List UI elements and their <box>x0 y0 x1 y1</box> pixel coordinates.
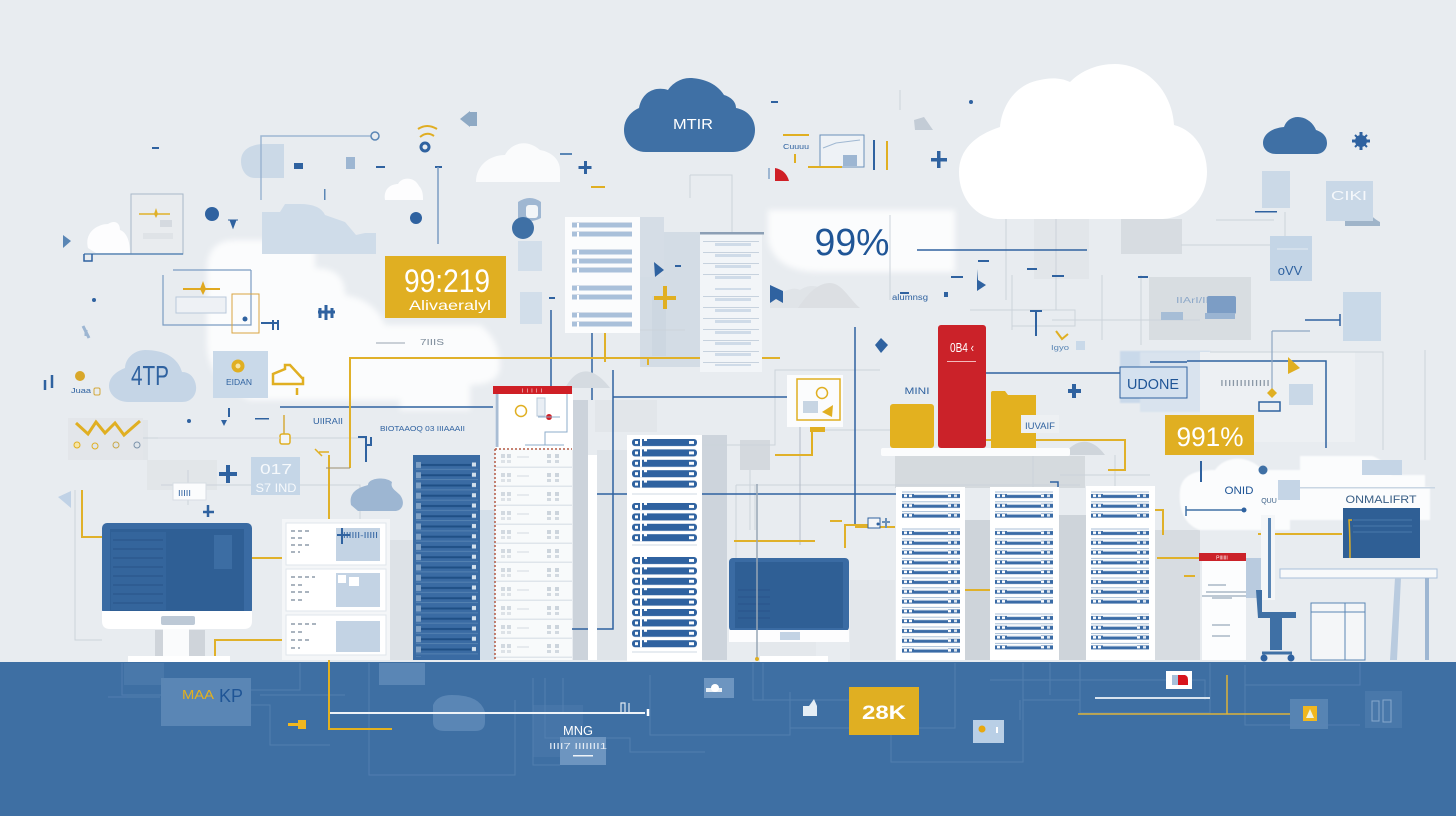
small panel: faded tablet right: CIKI <box>1331 188 1367 203</box>
panel stack: dashboard tiles <box>282 519 390 660</box>
band: MAA KP panel: MAA <box>182 687 214 702</box>
server rack: right 1 <box>896 487 965 660</box>
label: MNG: IIII7 IIIIIII1 <box>549 742 608 751</box>
server rack: right 2 <box>990 487 1059 660</box>
gold stat box: 991% <box>1165 415 1254 455</box>
label box: UDONE: UDONE <box>1127 376 1179 393</box>
gold stat box: 99:219 Availability: Alivaeralyl <box>409 297 491 313</box>
cloud: small blue <box>1263 117 1327 154</box>
gold alert icon and device <box>1051 331 1313 411</box>
small panel: monitor widget top center: Cuuuu <box>783 142 809 151</box>
icon: gold folder <box>273 365 303 395</box>
small labels: mid left: 7IIIS <box>420 338 444 347</box>
label: MNG <box>549 723 608 756</box>
gold alert icon and device: IIIIIIIIIIIII <box>1220 379 1270 388</box>
center rack faded upper left <box>565 217 640 333</box>
white column <box>588 455 597 660</box>
cloud: 4TP <box>109 350 196 402</box>
panel stack: dashboard tiles: IIIIIII-IIIII <box>340 531 378 540</box>
small coin badge panel: EIDAN <box>226 378 252 387</box>
small tag label <box>58 483 214 517</box>
bar: red with label <box>938 325 986 448</box>
stat: 99%: 99% <box>814 222 890 264</box>
small coin badge panel <box>213 351 268 398</box>
band: faint device <box>1372 700 1391 722</box>
bar: red with label: 0B4 ‹ <box>950 340 974 355</box>
white backdrop with ONID and ONMALIFRT labels: ONID <box>1224 485 1254 497</box>
band: light square with gold dot <box>973 720 1004 743</box>
office chair <box>1246 515 1296 662</box>
server rack: dark blue <box>413 455 480 660</box>
white backdrop with ONID and ONMALIFRT labels: QUU <box>1261 498 1277 505</box>
small panel: faded tablet right <box>1255 171 1381 341</box>
cloud: MTIR: MTIR <box>673 116 713 133</box>
gold stat box: 991%: 991% <box>1176 422 1244 452</box>
left status widgets <box>68 418 143 460</box>
gold box: 28K: 28K <box>862 703 906 724</box>
icon: red marker <box>768 168 789 181</box>
small labels: mid left <box>187 338 465 462</box>
workstation: desk, monitor, chair, cabinet <box>1180 456 1437 662</box>
small panel: monitor widget top center <box>771 100 973 170</box>
scattered blue marks <box>549 153 1148 336</box>
band: MAA KP panel: KP <box>219 686 243 706</box>
gold box: 28K <box>849 687 919 735</box>
gold alert icon and device: Igyo <box>1051 345 1069 352</box>
document icon with gold chart <box>787 375 843 456</box>
hazy white and grey backdrop shapes <box>68 210 1355 660</box>
label: MNG: MNG <box>563 723 593 738</box>
server rack: right 3 <box>1086 486 1155 660</box>
blue connector lines <box>280 250 1326 660</box>
center rack faded upper right <box>700 232 764 372</box>
white backdrop with ONID and ONMALIFRT labels <box>1180 456 1435 530</box>
small connector node <box>868 518 890 528</box>
icon: blue gear <box>1352 132 1370 150</box>
icon: plus marks <box>219 151 1081 483</box>
small panel: faded tablet right: oVV <box>1278 263 1303 278</box>
icon: gold plus <box>654 286 676 309</box>
icon: security shield and dot <box>512 198 542 324</box>
server rack: white with red header: IIIII <box>522 388 542 394</box>
icon: wifi with lock <box>418 126 437 151</box>
gold stat box: 99:219 Availability: 99:219 <box>404 263 490 299</box>
cloud: 4TP: 4TP <box>131 360 169 391</box>
filing cabinet: PIIIIII <box>1216 556 1228 562</box>
small panel: gray device cluster <box>1161 296 1236 320</box>
band: white and gold main lines <box>329 662 1290 730</box>
stat: 017 S7 IND <box>251 457 300 495</box>
band: faint circuit lines <box>108 663 1360 775</box>
scattered blue marks: alumnsg <box>892 293 928 302</box>
small labels: mid left: UIIRAII <box>313 417 343 426</box>
band: light panels <box>124 663 1402 765</box>
icon: arrow grey <box>460 111 477 127</box>
bar chart on shelf: MINI <box>904 386 930 396</box>
server rack: center white <box>627 435 702 661</box>
label box: UDONE <box>1120 367 1187 398</box>
monitor: left <box>102 523 252 662</box>
gold stat box: 99:219 Availability <box>385 256 506 318</box>
light clouds <box>87 143 1380 511</box>
small panel: gray device cluster: IIArI/II <box>1176 296 1209 305</box>
band: white icon with red mark <box>1166 671 1192 689</box>
gold padlock connector <box>158 415 350 468</box>
stat: 017 S7 IND: S7 IND <box>256 481 297 495</box>
small tag label: IIIII <box>178 489 191 498</box>
monitor: center <box>729 484 849 662</box>
filing cabinet <box>1199 553 1246 660</box>
yellow connector lines <box>82 310 1342 735</box>
band: small chip icons <box>704 678 817 716</box>
server rack: white with red header <box>493 386 573 660</box>
stat: 017 S7 IND: 017 <box>260 461 292 478</box>
small left coin label: Juaa <box>71 388 91 395</box>
tag: gold bar label: IUVAIF <box>1025 421 1056 431</box>
base band <box>0 662 1456 816</box>
small left coin label <box>45 371 100 395</box>
cloud: large white <box>959 64 1207 219</box>
band: gold warning chip <box>1303 706 1317 721</box>
band: MAA KP panel <box>161 678 251 726</box>
white backdrop with ONID and ONMALIFRT labels: ONMALIFRT <box>1346 494 1417 506</box>
cloud: MTIR <box>624 78 755 152</box>
bar chart on shelf <box>881 325 1070 456</box>
small labels: mid left: BIOTAAOQ 03 IIIAAAII <box>380 424 465 433</box>
icon: gold plug <box>288 720 306 729</box>
small network diagram group: upper left <box>63 132 442 338</box>
tag: gold bar label <box>1021 415 1059 433</box>
thin grey connector lines <box>75 90 1425 640</box>
